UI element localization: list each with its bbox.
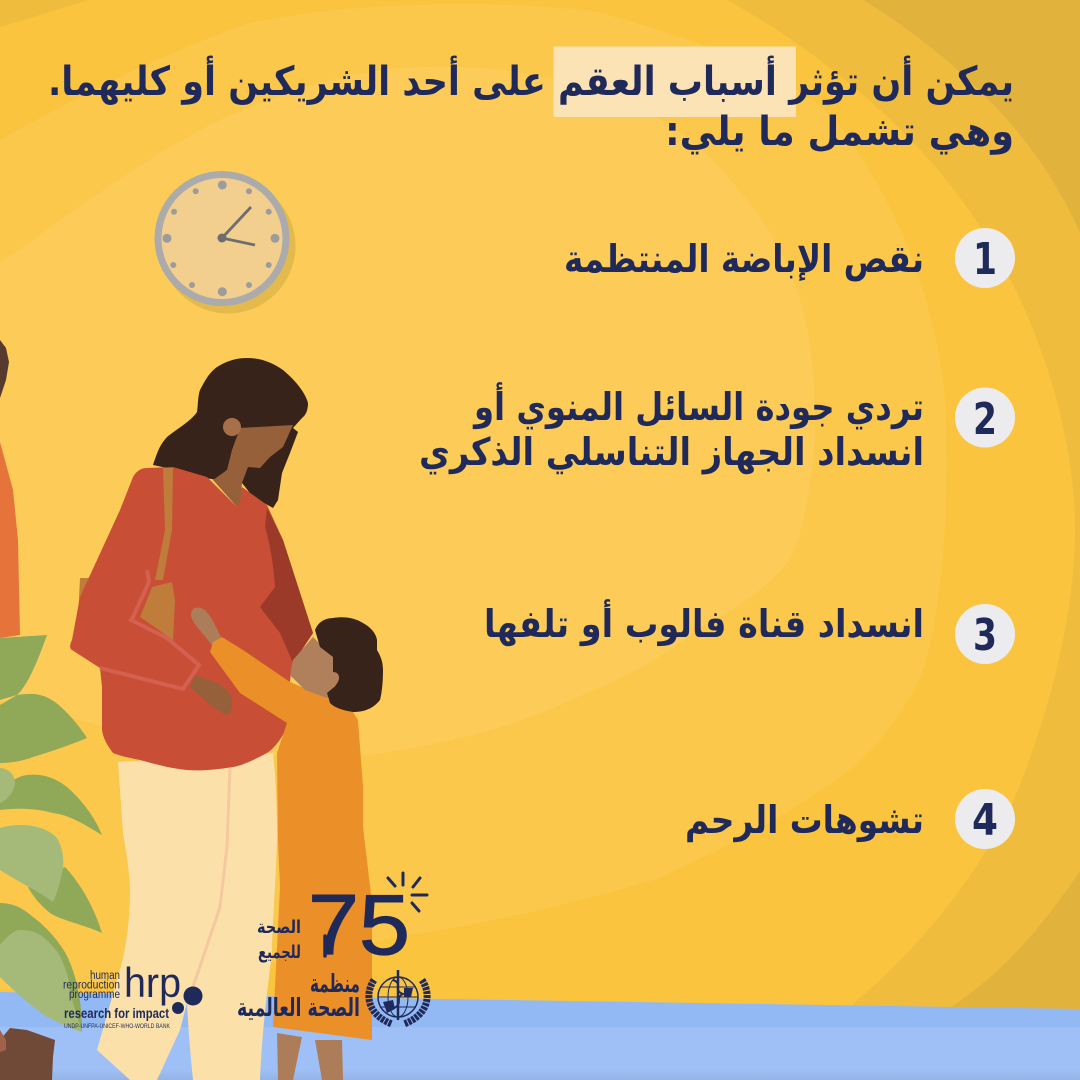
title [48,46,1014,155]
logo: HRP: UNDP-UNFPA-UNICEF-WHO-WORLD BANK [64,1024,170,1030]
face [290,637,335,698]
item 3 [484,599,1015,664]
small stem beside the 7 [323,936,327,956]
hand [191,608,221,645]
top [70,467,313,770]
floor [0,992,1080,1080]
logo: HRP: research for impact [64,1005,169,1021]
logo: WHO 75: للجميع [258,942,301,963]
number 75: 75 [308,878,410,973]
item 2: تردي جودة السائل المنوي أو [472,382,924,430]
top shading [260,508,313,663]
bag behind the arm [78,578,90,620]
item 2: 2 [973,394,997,445]
item 4: تشوهات الرحم [685,798,924,843]
item 3: 3 [973,610,997,661]
sleeve cuff [100,570,199,689]
face and neck [213,425,293,507]
left edge figure [0,340,20,638]
item 2: انسداد الجهاز التناسلي الذكري [419,430,924,474]
WHO name: منظمة [310,969,360,998]
item 4 [685,789,1015,849]
item 1 [564,228,1015,288]
logo: HRP [63,959,202,1030]
child [191,608,383,1080]
wall clock [154,171,296,314]
hair [315,617,383,712]
pants [97,753,277,1080]
plant with pot [0,635,102,1080]
WHO emblem [369,970,427,1024]
item 3: انسداد قناة فالوب أو تلفها [484,599,924,647]
legs [277,1033,302,1080]
title line 2: وهي تشمل ما يلي: [665,109,1014,155]
logo: WHO 75 [257,873,427,973]
sun rays [388,873,427,911]
item 4: 4 [972,795,998,846]
health for all: الصحة [257,917,301,938]
bag strap and bag [155,468,173,580]
logo: HRP: reproduction [63,980,120,992]
logo: WHO emblem and name [237,969,427,1024]
logo: WHO emblem and name: الصحة العالمية [237,993,360,1022]
hair [153,358,308,508]
dress [210,637,372,1040]
item 1: 1 [973,234,997,285]
item 1: نقص الإباضة المنتظمة [564,237,924,281]
title highlight [554,46,796,117]
woman [70,358,313,1080]
hand [190,675,232,715]
logo: HRP: human [90,970,120,982]
item 2 [419,382,1015,474]
logo: HRP: hrp [124,959,181,1006]
logo: HRP: programme [69,989,120,1001]
